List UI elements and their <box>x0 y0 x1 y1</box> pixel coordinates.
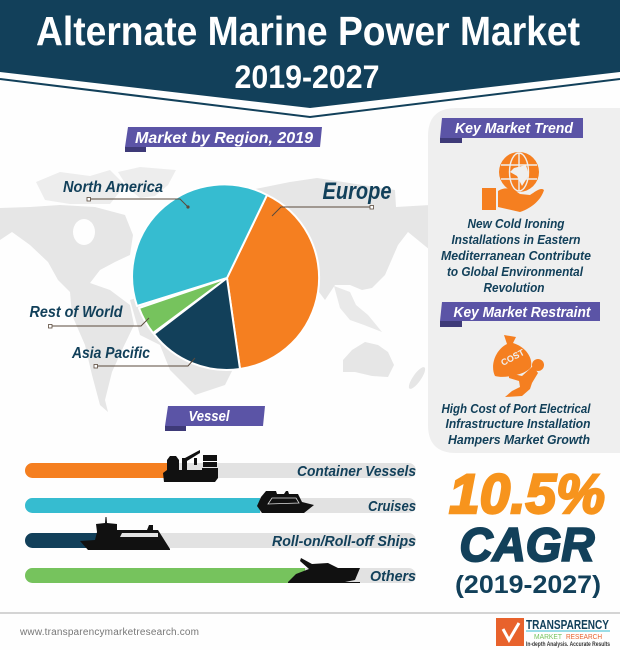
slice: Asia Pacific <box>154 278 240 370</box>
tag: market by region: Market by Region, 2019 <box>135 130 313 147</box>
bar: Container Vessels: Container Vessels <box>297 463 416 480</box>
text: key market restraint <box>442 401 591 447</box>
icon: container ship <box>163 450 218 482</box>
tag: key market restraint: Key Market Restraint <box>454 304 591 321</box>
world map background <box>0 167 430 412</box>
logo: Transparency Market Research <box>496 617 610 648</box>
label: North America: North America <box>63 179 163 196</box>
slice: Rest of World <box>139 278 227 333</box>
icon: person carrying cost bag: COST <box>499 347 526 368</box>
text: key market restraint: High Cost of Port Electrical <box>442 401 591 416</box>
icon: yacht <box>288 558 360 583</box>
label: Europe <box>272 178 392 216</box>
icon: person carrying cost bag <box>493 335 544 397</box>
text: key market trend <box>441 216 591 295</box>
logo: Transparency Market Research: MARKET <box>534 634 563 641</box>
stat: CAGR: CAGR <box>460 518 595 571</box>
footer divider <box>0 612 620 614</box>
label: Rest of World <box>30 304 149 328</box>
tag: key market trend: Key Market Trend <box>455 120 574 137</box>
bar: Others <box>25 558 416 585</box>
label: Asia Pacific <box>71 345 195 368</box>
bar: Roll-on/Roll-off Ships <box>25 517 416 550</box>
bar: Roll-on/Roll-off Ships: Roll-on/Roll-off Ships <box>272 533 416 550</box>
label: North America <box>63 179 190 209</box>
footer url: www.transparencymarketresearch.com <box>19 627 199 638</box>
icon: roll-on roll-off ship <box>80 517 170 550</box>
text: key market restraint: Infrastructure Installation <box>446 416 591 431</box>
icon: cruise ship <box>257 491 314 513</box>
title banner <box>0 0 620 117</box>
icon: globe in hand <box>482 152 544 212</box>
text: key market trend: Mediterranean Contribute <box>441 248 591 263</box>
text: key market trend: New Cold Ironing <box>468 216 565 231</box>
tag: key market trend <box>440 118 583 143</box>
subtitle years: 2019-2027 <box>234 59 380 95</box>
title: Alternate Marine Power Market <box>36 8 580 54</box>
tag: vessel: Vessel <box>188 408 230 425</box>
panel: key market trend and restraint <box>428 108 620 453</box>
text: key market trend: Revolution <box>484 280 545 295</box>
bar: Cruises <box>25 491 416 515</box>
tag: key market restraint <box>440 302 600 327</box>
text: key market trend: to Global Environmental <box>447 264 583 279</box>
bar: Cruises: Cruises <box>368 498 416 515</box>
slice: North America <box>132 184 267 306</box>
slice: Europe <box>227 195 319 369</box>
bar: Container Vessels <box>25 450 416 482</box>
tag: market by region <box>125 127 322 152</box>
tag: vessel <box>165 406 265 431</box>
label: Asia Pacific: Asia Pacific <box>71 345 150 362</box>
logo: Transparency Market Research: RESEARCH <box>566 634 602 641</box>
pie chart: market by region <box>132 184 319 370</box>
bar: Others: Others <box>370 568 416 585</box>
label: Rest of World: Rest of World <box>30 304 123 321</box>
stat: 10.5%: 10.5% <box>449 462 605 525</box>
text: key market trend: Installations in Eastern <box>452 232 581 247</box>
stat: period: (2019-2027) <box>455 571 601 599</box>
label: Europe: Europe <box>322 178 392 205</box>
text: key market restraint: Hampers Market Growth <box>448 432 590 447</box>
